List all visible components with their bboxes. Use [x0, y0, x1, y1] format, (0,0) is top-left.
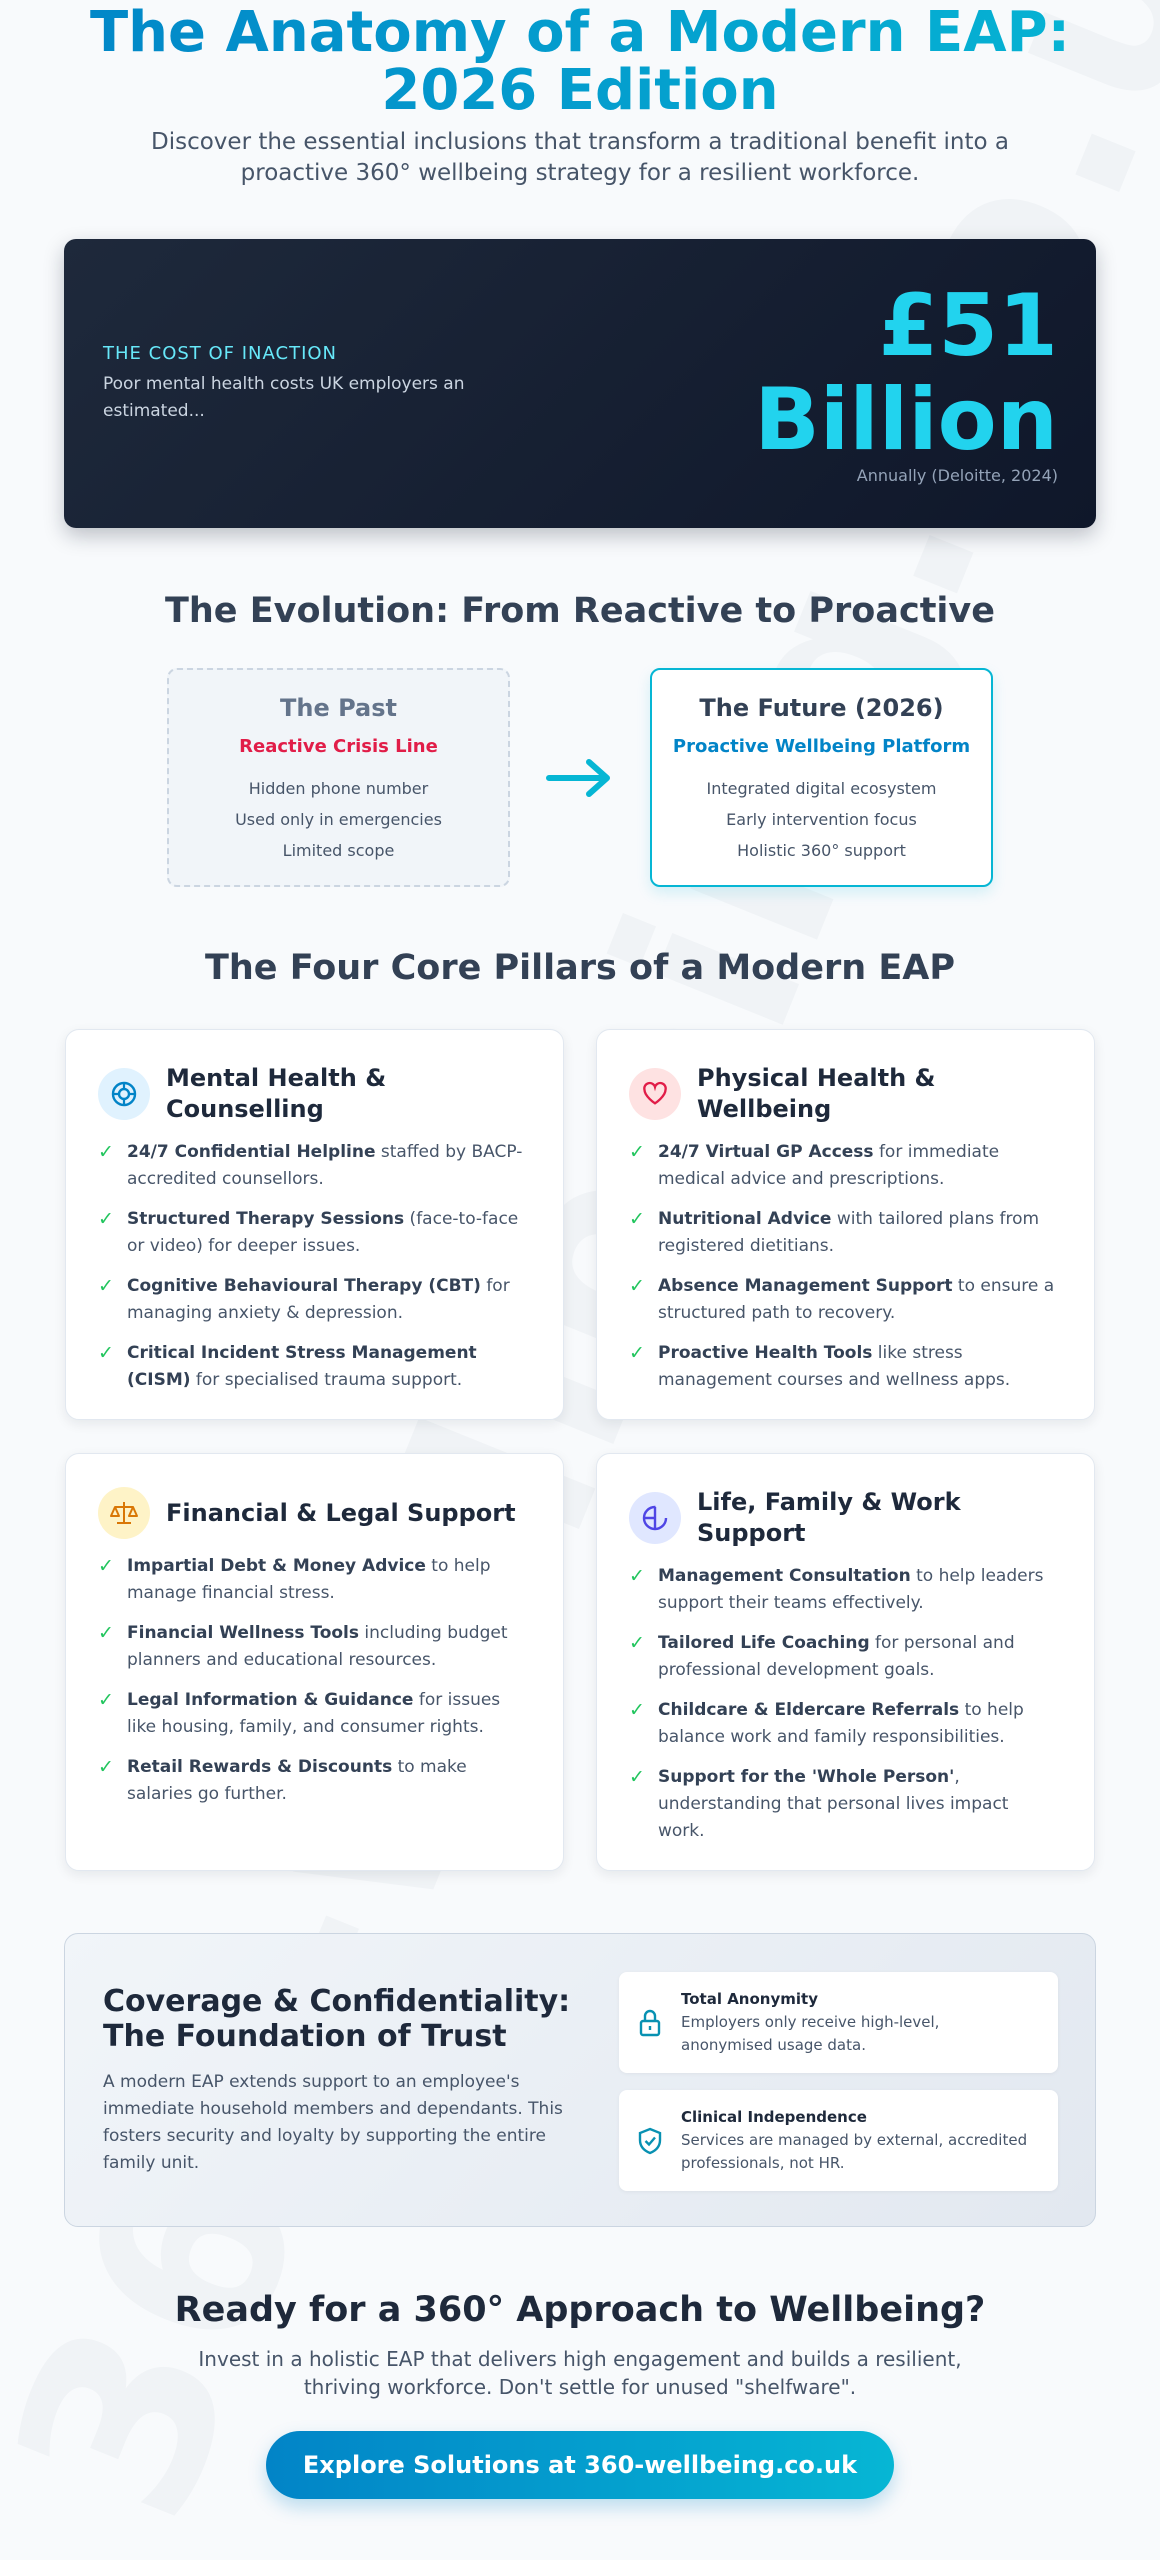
card heading: Life, Family & Work	[697, 1488, 961, 1516]
source note: Annually (Deloitte, 2024)	[857, 466, 1058, 485]
subtitle: Discover the essential inclusions that transform a traditional benefit into a proactive 360° wellbeing strategy for a resilient workforce.	[151, 129, 1009, 186]
card heading	[629, 1488, 961, 1547]
card heading	[98, 1487, 516, 1539]
heading: four pillars: The Four Core Pillars of a Modern EAP	[205, 948, 955, 988]
panel: physical health	[596, 1029, 1095, 1420]
panel: the past: Hidden phone number	[249, 779, 428, 798]
card heading: Financial & Legal Support	[166, 1498, 516, 1526]
card: clinical independence	[619, 2090, 1058, 2191]
panel: mental health: Cognitive Behavioural Therapy (CBT) for managing anxiety & depression.	[127, 1276, 510, 1323]
panel: the past: Used only in emergencies	[235, 810, 442, 829]
panel: the future	[650, 668, 993, 887]
button	[266, 2431, 894, 2499]
heading: call to action: Ready for a 360° Approach to Wellbeing?	[175, 2290, 985, 2330]
panel: the future: Early intervention focus	[726, 810, 917, 829]
card heading: Counselling	[166, 1095, 324, 1123]
card: clinical independence: Services are managed by external, accredited professionals, not HR.	[681, 2131, 1027, 2172]
stat: £51 Billion	[754, 276, 1058, 470]
panel: financial & legal: Legal Information & Guidance for issues like housing, family, and consumer rights.	[127, 1690, 500, 1737]
panel: the future: The Future (2026)	[699, 694, 944, 722]
card: total anonymity: Employers only receive high-level, anonymised usage data.	[681, 2013, 939, 2054]
panel: cost of inaction	[64, 239, 1096, 528]
panel: financial & legal	[65, 1453, 564, 1871]
panel: life family work: Tailored Life Coaching for personal and professional development goals.	[658, 1633, 1015, 1680]
panel: the future: Holistic 360° support	[737, 841, 906, 860]
cta text: Invest in a holistic EAP that delivers high engagement and builds a resilient, thriving workforce. Don't settle for unused "shelfware".	[198, 2347, 962, 2399]
panel: life family work: Management Consultation to help leaders support their teams effectively.	[658, 1566, 1043, 1613]
panel: mental health	[65, 1029, 564, 1420]
button: Explore Solutions at 360-wellbeing.co.uk	[303, 2451, 857, 2479]
panel: financial & legal: Impartial Debt & Money Advice to help manage financial stress.	[127, 1556, 491, 1603]
title: 2026 Edition	[381, 58, 779, 123]
heading: The Foundation of Trust	[103, 2019, 507, 2054]
heading: Coverage & Confidentiality:	[103, 1984, 570, 2019]
panel: life family work	[596, 1453, 1095, 1871]
panel: the future: Integrated digital ecosystem	[707, 779, 936, 798]
card heading	[98, 1064, 386, 1123]
panel: the past: The Past	[280, 694, 397, 722]
panel: mental health: 24/7 Confidential Helpline staffed by BACP-accredited counsellors.	[127, 1142, 522, 1189]
card heading: Wellbeing	[697, 1095, 831, 1123]
card heading: Physical Health &	[697, 1064, 935, 1092]
panel: the future: Proactive Wellbeing Platform	[673, 736, 970, 757]
panel: physical health: Proactive Health Tools like stress management courses and wellness apps.	[658, 1343, 1010, 1390]
stat: £51 Billion: £51	[878, 276, 1058, 376]
label: cost of inaction: THE COST OF INACTION	[103, 343, 337, 364]
stat: £51 Billion: Billion	[754, 370, 1058, 470]
heading	[103, 1984, 570, 2054]
text: cost description: Poor mental health costs UK employers an estimated...	[103, 374, 464, 421]
panel: life family work: Support for the 'Whole Person', understanding that personal lives impact work.	[658, 1767, 1008, 1841]
panel: mental health: Critical Incident Stress Management (CISM) for specialised trauma support.	[127, 1343, 477, 1390]
panel: mental health: Structured Therapy Sessions (face-to-face or video) for deeper issues.	[127, 1209, 518, 1256]
card heading: Mental Health &	[166, 1064, 386, 1092]
panel: financial & legal: Retail Rewards & Discounts to make salaries go further.	[127, 1757, 467, 1804]
panel: coverage & confidentiality	[64, 1933, 1096, 2227]
arrow	[546, 759, 610, 797]
heading: evolution: The Evolution: From Reactive to Proactive	[165, 591, 995, 631]
panel: physical health: Nutritional Advice with tailored plans from registered dietitians.	[658, 1209, 1039, 1256]
card heading	[629, 1064, 935, 1123]
panel: the past: Limited scope	[283, 841, 394, 860]
paragraph: A modern EAP extends support to an employee's immediate household members and dependants. This fosters security and loyalty by supporting the entire family unit.	[103, 2072, 563, 2173]
panel: the past	[167, 668, 510, 887]
panel: the past: Reactive Crisis Line	[239, 736, 438, 757]
card: clinical independence: Clinical Independence	[681, 2108, 867, 2126]
panel: physical health: Absence Management Support to ensure a structured path to recovery.	[658, 1276, 1054, 1323]
panel: physical health: 24/7 Virtual GP Access for immediate medical advice and prescriptions.	[658, 1142, 999, 1189]
title: The Anatomy of a Modern EAP:	[90, 0, 1070, 65]
card heading: Support	[697, 1519, 806, 1547]
title	[0, 4, 1160, 120]
card: total anonymity	[619, 1972, 1058, 2073]
panel: life family work: Childcare & Eldercare Referrals to help balance work and family responsibilities.	[658, 1700, 1024, 1747]
card: total anonymity: Total Anonymity	[681, 1990, 818, 2008]
panel: financial & legal: Financial Wellness Tools including budget planners and educational resources.	[127, 1623, 508, 1670]
